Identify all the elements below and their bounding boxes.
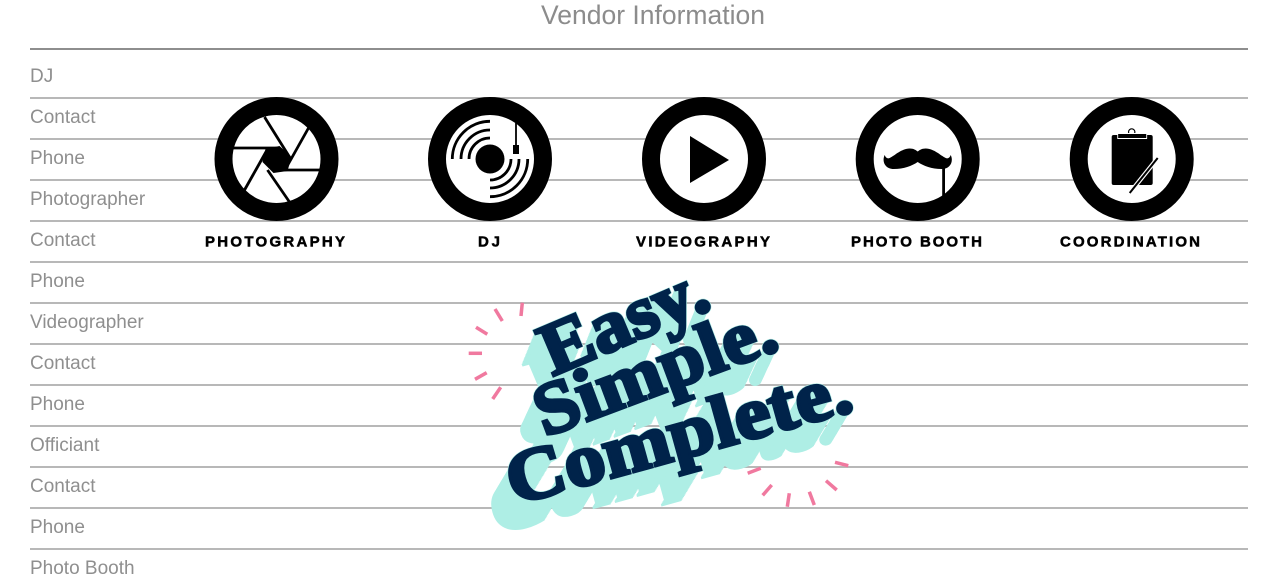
icon: mustache on a stick <box>865 106 971 212</box>
title: Vendor Information <box>541 0 765 30</box>
line: Simple: Simple. <box>522 288 788 453</box>
row: Photographer contact: Contact <box>30 230 95 251</box>
label: photography: PHOTOGRAPHY <box>205 234 345 250</box>
row: Videographer: Videographer <box>30 312 144 333</box>
row: Photographer phone: Phone <box>30 271 85 292</box>
row: DJ phone: Phone <box>30 148 85 169</box>
row: Officiant phone: Phone <box>30 517 85 538</box>
row: Officiant contact: Contact <box>30 476 95 497</box>
row: Officiant: Officiant <box>30 435 99 456</box>
form rows <box>30 66 145 579</box>
slogan mint extrusion: Simple. <box>522 288 788 453</box>
slogan mint extrusion: Easy. <box>527 248 720 392</box>
label: photo booth: PHOTO BOOTH <box>851 234 982 250</box>
label: videography: VIDEOGRAPHY <box>636 234 770 250</box>
icon: camera aperture <box>224 106 330 212</box>
slogan mint extrusion: Complete. <box>496 348 860 521</box>
row: Videographer contact: Contact <box>30 353 95 374</box>
icon: play button <box>651 106 757 212</box>
row: Photographer: Photographer <box>30 189 145 210</box>
row: Videographer phone: Phone <box>30 394 85 415</box>
line: Easy: Easy. <box>527 248 720 392</box>
label: coordination: COORDINATION <box>1060 234 1200 250</box>
sparks: lower right <box>748 462 848 507</box>
line: Complete: Complete. <box>496 348 860 521</box>
icon: clipboard and pen <box>1079 106 1185 212</box>
row: DJ contact: Contact <box>30 107 95 128</box>
row: DJ: DJ <box>30 66 53 87</box>
row: Photo Booth: Photo Booth <box>30 558 135 579</box>
icon: vinyl record <box>437 106 543 212</box>
label: dj: DJ <box>478 234 500 250</box>
sparks: upper left <box>469 303 522 399</box>
